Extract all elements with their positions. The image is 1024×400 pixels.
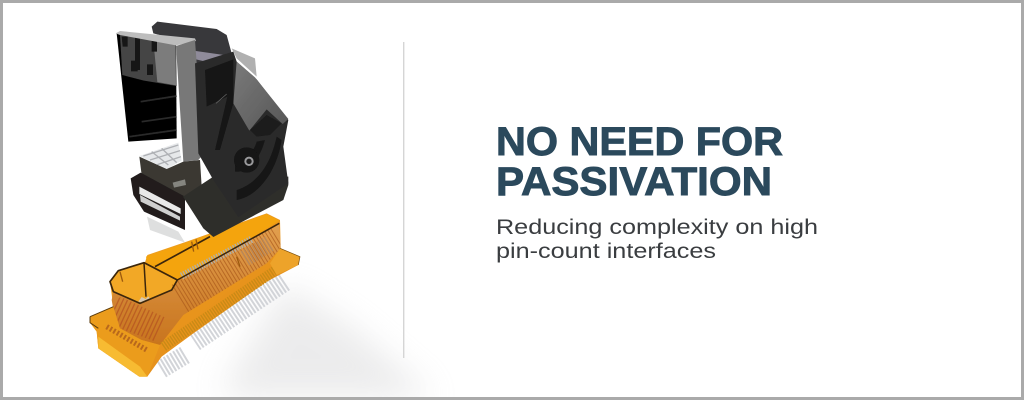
vertical divider <box>403 42 404 358</box>
subtitle <box>496 216 818 263</box>
main body plate <box>195 52 288 217</box>
body ribs <box>205 59 233 150</box>
lower dark base with white stripes <box>131 173 185 230</box>
inner shelves <box>129 96 177 137</box>
internal pin stripes <box>113 238 278 332</box>
subtitle: Reducing complexity on high <box>496 216 818 239</box>
rear hood <box>152 22 232 65</box>
top opening of housing <box>110 263 177 303</box>
title: NO NEED FOR <box>496 120 783 164</box>
drop shadow of connector <box>225 285 435 398</box>
dark base block <box>183 177 288 237</box>
white base below block <box>147 217 185 243</box>
pin block side <box>139 157 202 198</box>
black upper actuator <box>116 22 288 243</box>
flange teeth <box>163 268 278 347</box>
open frame back wall <box>117 33 177 142</box>
small amber contact details <box>120 239 240 282</box>
subtitle: pin-count interfaces <box>496 240 716 263</box>
amber housing silhouette <box>90 213 300 377</box>
frame top rim <box>116 31 196 45</box>
grey side wall <box>176 40 204 162</box>
curved slots <box>237 137 282 200</box>
grey pins seen through top <box>182 239 252 276</box>
grey upper back wall <box>120 35 177 86</box>
orange lower connector <box>90 213 300 377</box>
right flange <box>270 248 300 275</box>
white pin block top <box>139 143 182 169</box>
connector illustration <box>90 22 300 377</box>
pivot knob <box>234 147 259 173</box>
dark slots in wall <box>122 33 157 75</box>
long top surface <box>146 214 279 279</box>
title: PASSIVATION <box>496 160 772 204</box>
white pin field <box>160 280 283 370</box>
latch detail <box>250 115 282 137</box>
title <box>496 120 783 204</box>
pins in opening <box>138 296 150 303</box>
front face with translucent pins <box>112 223 281 345</box>
left flange <box>90 307 160 377</box>
grey cap at rear right <box>232 48 257 77</box>
dark housing edges <box>90 223 300 328</box>
translucent grey panel <box>233 62 288 131</box>
light panel under hood <box>193 51 224 63</box>
